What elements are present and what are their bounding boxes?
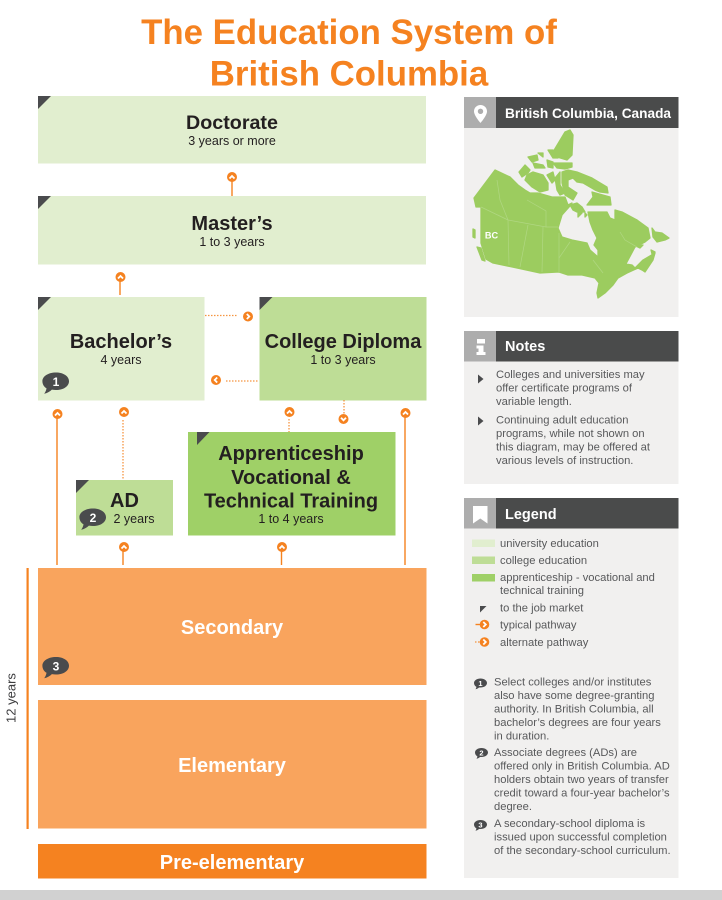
legend: apprenticeship: apprenticeship - vocational and: [500, 572, 655, 584]
note bullets and text: offer certificate programs of: [496, 382, 633, 394]
title: British Columbia: [210, 54, 489, 94]
box: AD: 2 years: [114, 512, 154, 526]
title: [141, 13, 557, 94]
footnote 2: holders obtain two years of transfer: [494, 774, 669, 786]
legend: apprenticeship: [472, 572, 655, 597]
box: Apprenticeship Vocational and Technical Training: Apprenticeship: [218, 443, 364, 465]
box: Bachelor's: Bachelor’s: [70, 331, 172, 353]
footnote 1: 1: [478, 679, 483, 688]
footnote 2: credit toward a four-year bachelor’s: [494, 788, 670, 800]
footnote 2: offered only in British Columbia. AD: [494, 760, 670, 772]
icon: bookmark: [473, 506, 488, 524]
box: Pre-elementary: Pre-elementary: [160, 852, 305, 874]
note bubble 2: 2: [90, 511, 97, 525]
note bullets and text: programs, while not shown on: [496, 428, 645, 440]
footnote 1: bachelor’s degrees are four years: [494, 717, 661, 729]
footnote 2: [475, 747, 670, 813]
box: Elementary: [38, 700, 426, 828]
panel: British Columbia, Canada: British Columbia, Canada: [505, 106, 671, 121]
note bullets and text: Continuing adult education: [496, 414, 628, 426]
legend: college education: college education: [500, 555, 587, 567]
box: Apprenticeship Vocational and Technical Training: [188, 432, 396, 536]
arrow: Secondary to Bachelor's: [52, 409, 62, 565]
note bubble 3: 3: [53, 660, 60, 674]
box: Apprenticeship Vocational and Technical Training: 1 to 4 years: [258, 512, 324, 526]
note bubble 1: 1: [53, 375, 60, 389]
icon: map pin: [474, 105, 487, 123]
panel: Notes: Notes: [505, 339, 545, 355]
bottom band: [0, 890, 722, 900]
box: Bachelor's: [38, 297, 204, 400]
box: Doctorate: Doctorate: [186, 112, 278, 134]
footnote 2: Associate degrees (ADs) are: [494, 747, 637, 759]
footnote 3: 3: [478, 820, 483, 830]
legend: typical pathway: typical pathway: [500, 620, 577, 632]
note bullets and text: Colleges and universities may: [496, 369, 645, 381]
footnote 1: authority. In British Columbia, all: [494, 704, 654, 716]
footnote 3: A secondary-school diploma is: [494, 818, 646, 830]
footnote 1: also have some degree-granting: [494, 690, 654, 702]
arrow: AD to Bachelor's: [119, 407, 129, 480]
arrow: Secondary to Apprenticeship: [277, 542, 287, 565]
box: College Diploma: 1 to 3 years: [310, 353, 376, 367]
map of Canada: [473, 130, 669, 298]
panel: Legend: [464, 498, 678, 878]
arrow: Bachelor's to College Diploma: [205, 312, 253, 322]
box: Elementary: Elementary: [178, 755, 287, 777]
note bullets and text: [478, 369, 651, 467]
footnote 2: 2: [479, 748, 484, 758]
box: Doctorate: 3 years or more: [188, 134, 276, 148]
box: Master's: Master’s: [191, 213, 273, 235]
icon: info: [476, 339, 486, 355]
footnote 1: Select colleges and/or institutes: [494, 676, 652, 688]
panel: Notes: [464, 331, 678, 484]
footnote 1: in duration.: [494, 730, 549, 742]
legend: university education: university education: [500, 538, 599, 550]
arrow: Secondary to AD: [119, 542, 129, 565]
box: Apprenticeship Vocational and Technical Training: Vocational &: [231, 467, 351, 489]
note bubble 1: [42, 372, 69, 394]
arrow: Apprenticeship to College Diploma: [284, 407, 294, 432]
arrow: Secondary to College Diploma: [400, 408, 410, 565]
legend: to the job market: to the job market: [500, 602, 584, 614]
footnote 1: [474, 676, 661, 742]
panel: Legend: Legend: [505, 507, 557, 523]
footnote 3: [474, 818, 671, 857]
box: Secondary: Secondary: [181, 617, 284, 639]
box: AD: AD: [110, 490, 139, 512]
panel: British Columbia, Canada: [464, 97, 678, 317]
note bullets and text: this diagram, may be offered at: [496, 442, 651, 454]
legend: alternate pathway: alternate pathway: [500, 637, 589, 649]
12 years bracket: 12 years: [4, 673, 18, 723]
arrow: College Diploma to Bachelor's: [211, 375, 259, 385]
title: The Education System of: [141, 13, 557, 52]
box: Bachelor's: 4 years: [100, 353, 142, 367]
arrow: Master's to Doctorate: [227, 172, 237, 196]
box: AD: [76, 480, 173, 536]
box: Master's: [38, 196, 426, 264]
box: Pre-elementary: [38, 844, 426, 878]
footnote 2: degree.: [494, 801, 532, 813]
box: College Diploma: College Diploma: [265, 331, 422, 353]
box: Master's: 1 to 3 years: [199, 235, 265, 249]
footnote 3: of the secondary-school curriculum.: [494, 845, 671, 857]
note bullets and text: various levels of instruction.: [496, 455, 633, 467]
box: Secondary: [38, 568, 426, 685]
box: Apprenticeship Vocational and Technical Training: Technical Training: [204, 490, 378, 512]
box: Doctorate: [38, 96, 426, 164]
box: College Diploma: [260, 297, 426, 400]
footnote 3: issued upon successful completion: [494, 832, 667, 844]
note bullets and text: variable length.: [496, 396, 572, 408]
arrow: College Diploma to Apprenticeship: [338, 400, 348, 424]
arrow: Bachelor's to Master's: [116, 272, 126, 295]
legend: apprenticeship: technical training: [500, 585, 584, 597]
note bubble 3: [42, 657, 69, 678]
map of Canada: BC: [485, 230, 498, 240]
